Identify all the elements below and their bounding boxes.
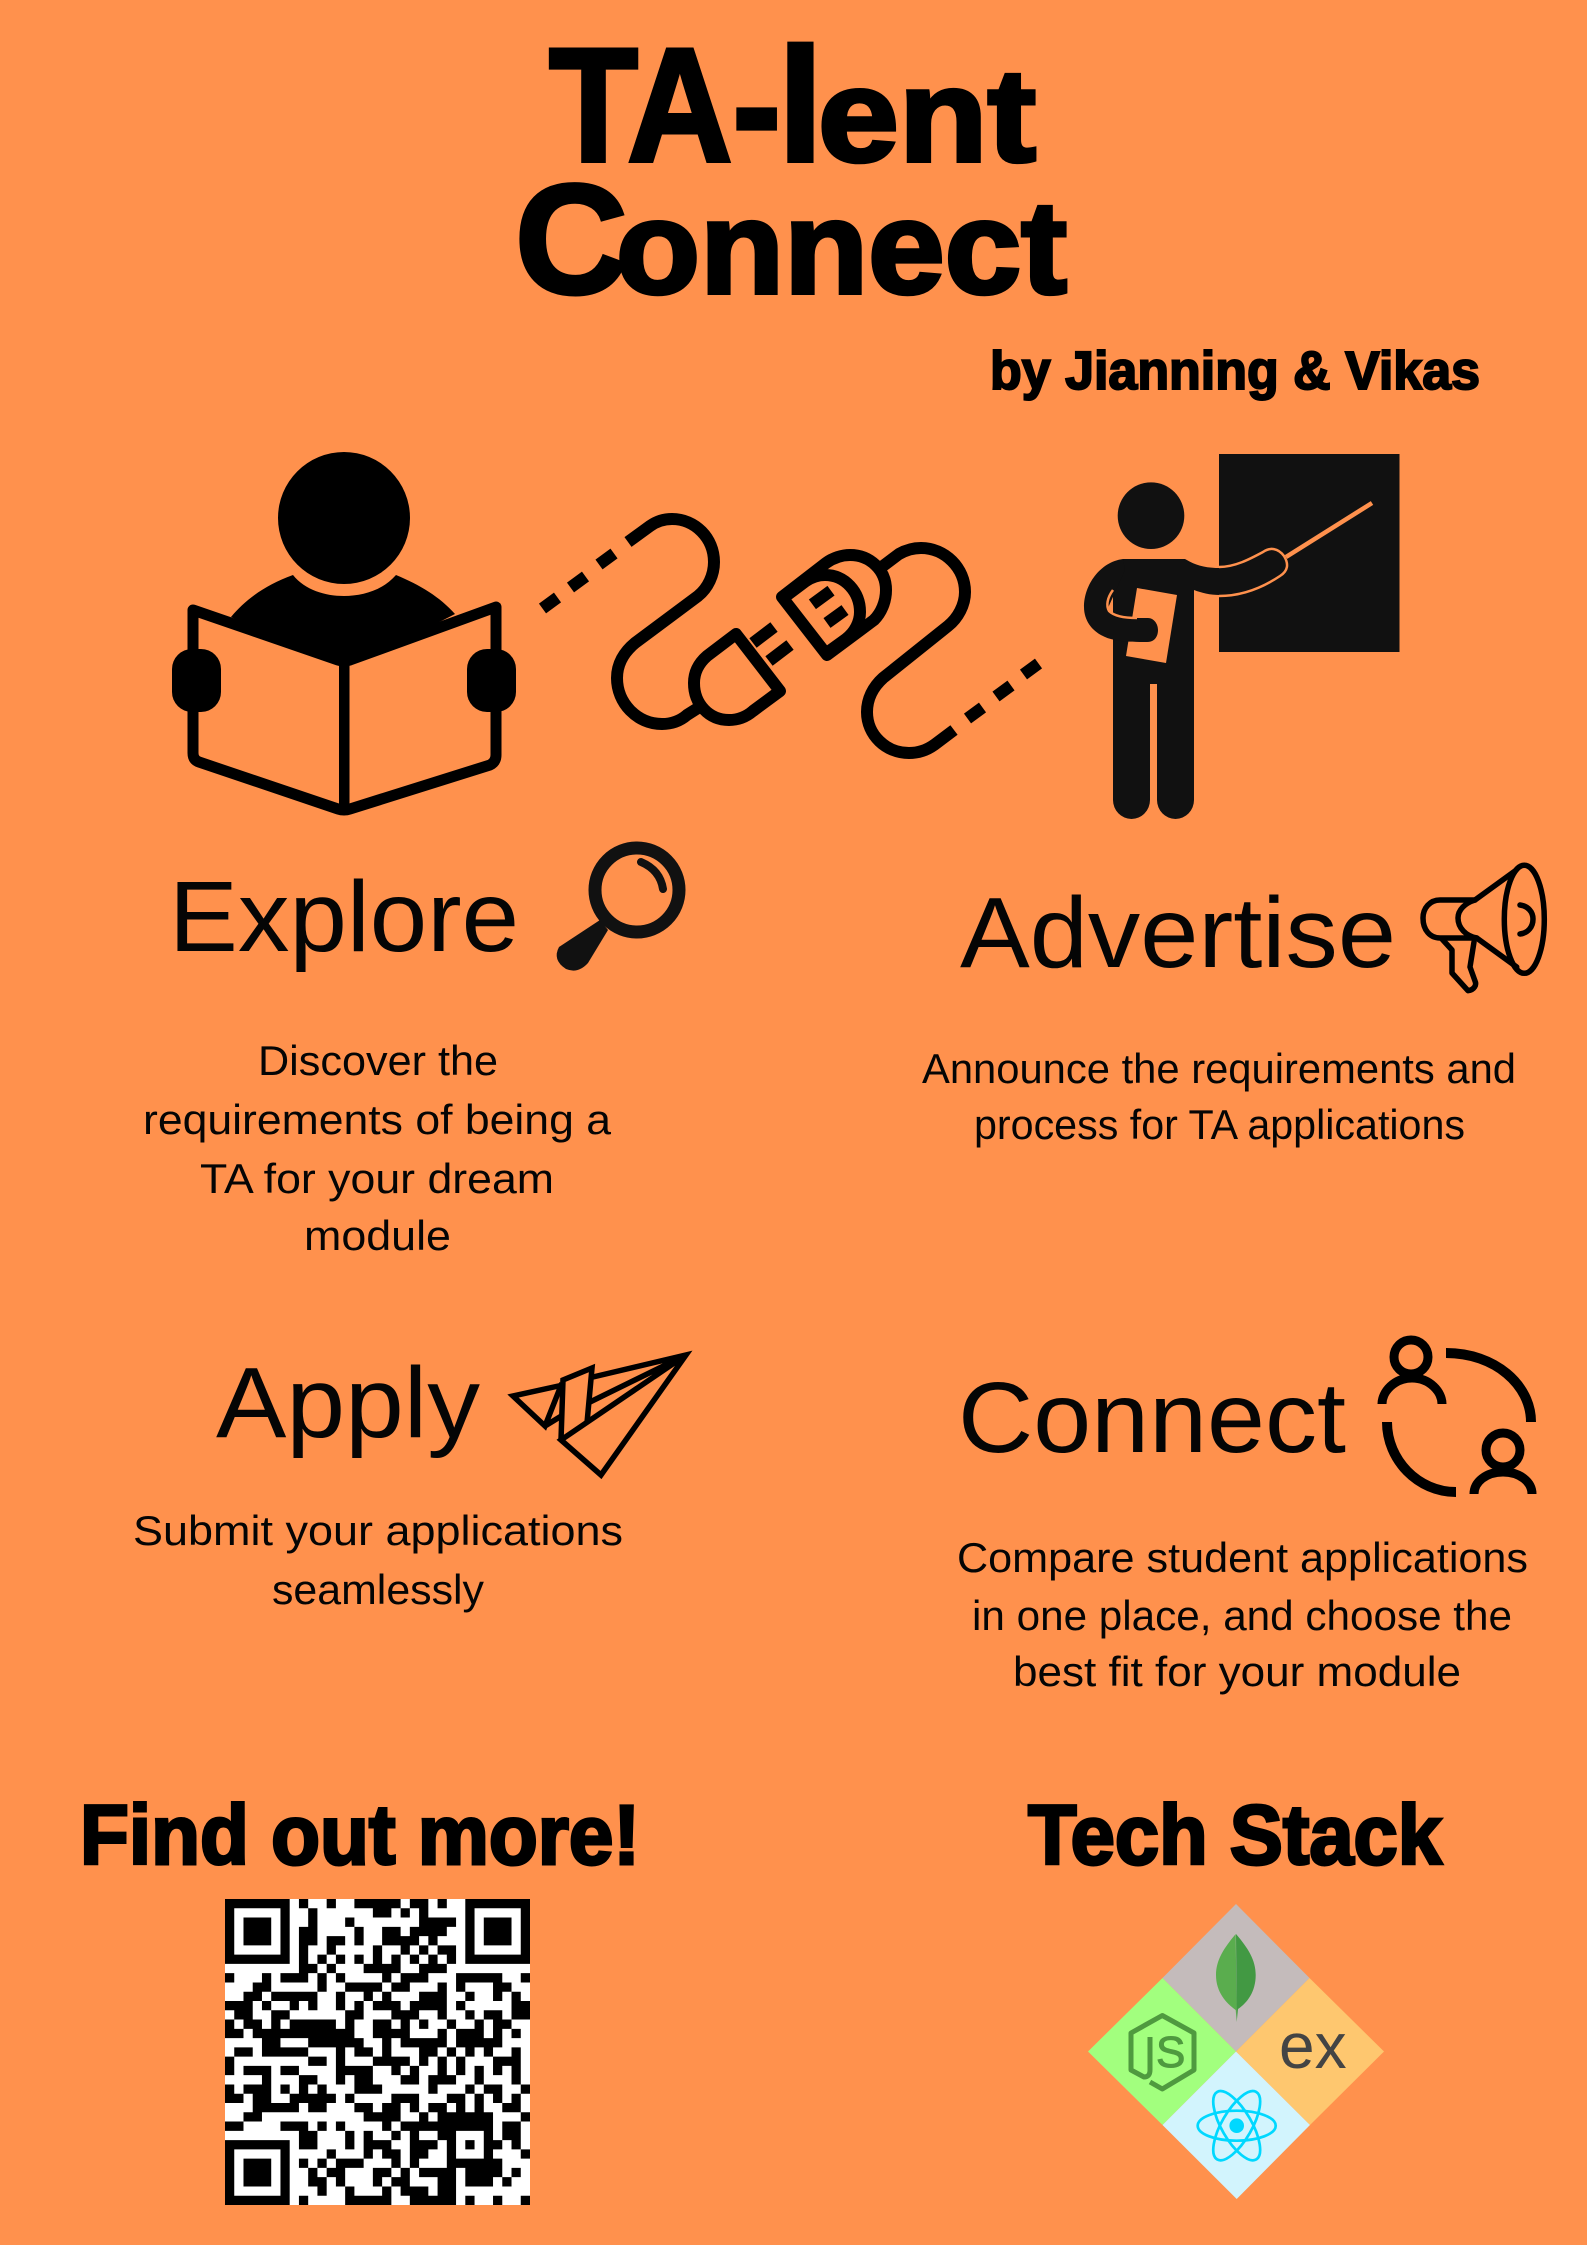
heading: find out more: Find out more!	[80, 1788, 640, 1882]
text: apply description	[133, 1507, 623, 1613]
tile: node js	[1088, 1978, 1236, 2125]
text: advertise description: Announce the requirements and	[922, 1045, 1516, 1092]
tile: react	[1162, 2052, 1310, 2199]
text: advertise description	[922, 1045, 1516, 1148]
icon: plug and socket connection	[542, 519, 1038, 753]
text: advertise description: process for TA applications	[974, 1101, 1465, 1148]
text: explore description: TA for your dream	[200, 1155, 554, 1202]
panel: connect	[957, 1340, 1532, 1695]
text: explore description: Discover the	[258, 1037, 498, 1084]
text: connect description: in one place, and choose the	[972, 1592, 1512, 1639]
QR code	[225, 1899, 530, 2205]
icon: paper airplane	[513, 1355, 686, 1475]
text: explore description	[143, 1037, 612, 1259]
heading: apply: Apply	[216, 1347, 480, 1459]
icon: two people connected	[1382, 1340, 1532, 1494]
title: onnect	[616, 174, 1067, 321]
text: explore description: requirements of being a	[143, 1096, 612, 1143]
byline: by Jianning & Vikas	[990, 341, 1480, 401]
icon: megaphone	[1423, 865, 1544, 991]
title	[515, 15, 1067, 327]
heading: connect: Connect	[958, 1362, 1346, 1474]
text: apply description: Submit your applications	[133, 1507, 623, 1554]
text: apply description: seamlessly	[272, 1566, 484, 1613]
heading: explore: Explore	[169, 861, 519, 973]
panel: apply	[133, 1347, 686, 1613]
title: ent	[818, 42, 1036, 189]
tile: express	[1236, 1978, 1384, 2125]
text: connect description	[957, 1534, 1528, 1695]
tile: mongodb	[1162, 1904, 1310, 2052]
tile: node js: S	[1156, 2028, 1185, 2077]
text: connect description: best fit for your module	[1013, 1648, 1461, 1695]
text: connect description: Compare student applications	[957, 1534, 1528, 1581]
tile: express: ex	[1279, 2010, 1347, 2082]
title: l	[778, 15, 823, 196]
text: explore description: module	[304, 1212, 451, 1259]
panel: explore	[143, 848, 679, 1259]
title: TA-	[549, 15, 781, 196]
title: C	[515, 153, 628, 327]
tech stack diamond	[1088, 1904, 1384, 2199]
heading: tech stack: Tech Stack	[1028, 1788, 1442, 1882]
panel: advertise	[922, 865, 1544, 1148]
icon: magnifying glass	[557, 848, 679, 971]
heading: advertise: Advertise	[960, 877, 1396, 989]
icon: teacher pointing at board	[1084, 454, 1400, 819]
icon: student reading a book	[172, 452, 516, 812]
